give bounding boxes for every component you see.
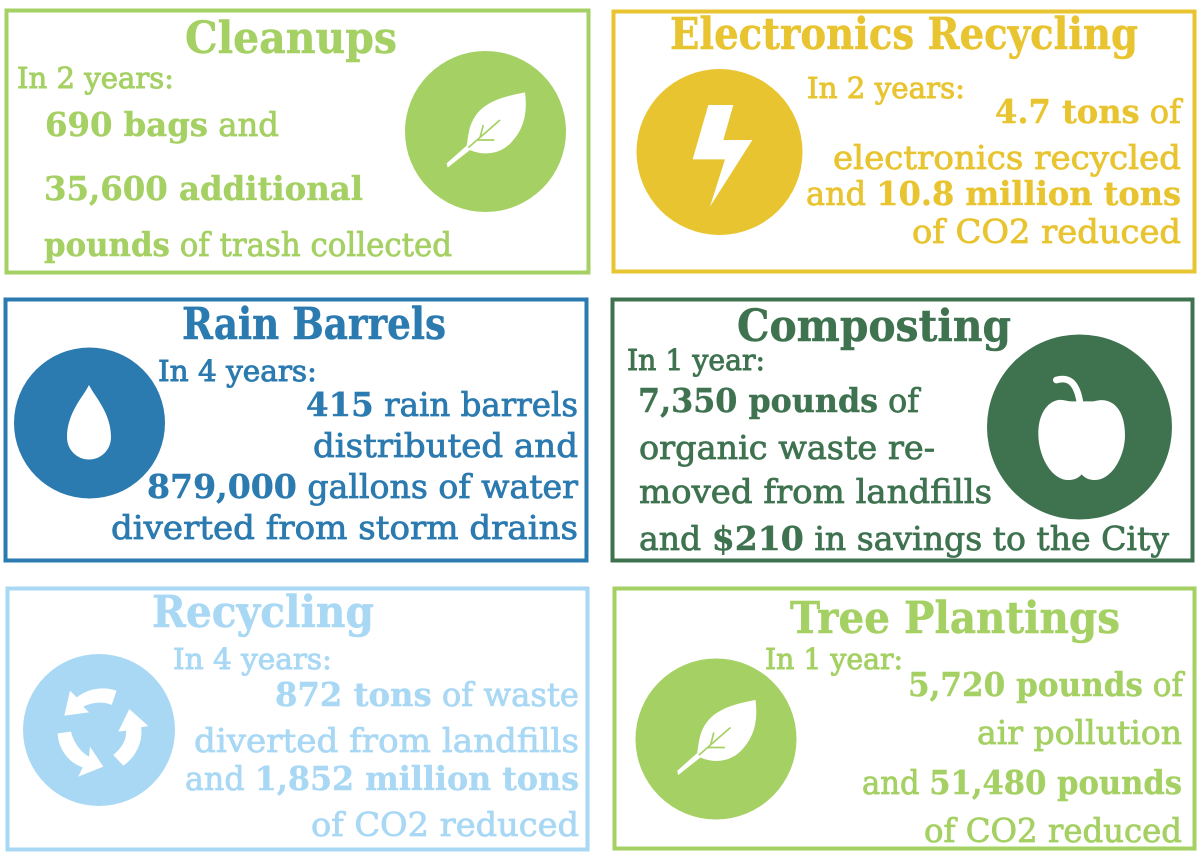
text block: recycling stats xyxy=(185,675,579,844)
text: period: In 4 years: xyxy=(173,642,332,676)
text block: tree planting stats xyxy=(862,665,1186,850)
panel: electronics recycling xyxy=(614,9,1194,272)
panel: rain barrels xyxy=(6,299,586,560)
text block: composting stats: 7,350 pounds of xyxy=(638,381,922,420)
heading: Rain Barrels: Rain Barrels xyxy=(182,299,446,350)
text block: cleanups stats xyxy=(44,105,452,264)
text block: recycling stats: 872 tons of waste xyxy=(275,675,579,714)
text block: rain barrel stats: distributed and xyxy=(313,426,578,465)
text: period: In 2 years: xyxy=(807,71,965,105)
text block: electronics stats: electronics recycled xyxy=(833,138,1181,177)
text block: electronics stats: and 10.8 million tons xyxy=(806,174,1181,213)
text: period: In 1 year: xyxy=(765,642,903,676)
text block: rain barrel stats: diverted from storm drains xyxy=(111,508,578,547)
text block: electronics stats: of CO2 reduced xyxy=(912,212,1181,251)
icon: lightning bolt in yellow circle xyxy=(636,69,802,235)
text block: composting stats: organic waste re- xyxy=(639,428,935,467)
text block: tree planting stats: of CO2 reduced xyxy=(924,811,1182,850)
panel: cleanups xyxy=(6,10,588,272)
text block: recycling stats: and 1,852 million tons xyxy=(185,759,579,798)
text: period: In 4 years: xyxy=(158,354,317,388)
heading: Cleanups: Cleanups xyxy=(185,13,397,64)
text block: composting stats xyxy=(638,381,1169,558)
panel: tree plantings xyxy=(614,588,1194,850)
icon: leaf in green circle xyxy=(405,51,566,212)
heading: Recycling: Recycling xyxy=(152,587,374,638)
text block: composting stats: moved from landfills xyxy=(639,472,992,511)
text block: recycling stats: of CO2 reduced xyxy=(311,805,579,844)
icon: recycling arrows in light blue circle xyxy=(23,654,175,806)
text block: rain barrel stats xyxy=(111,385,578,547)
text block: cleanups stats: 35,600 additional xyxy=(44,169,363,208)
panel: recycling xyxy=(8,587,588,850)
text: period: In 1 year: xyxy=(627,343,765,377)
text block: rain barrel stats: 415 rain barrels xyxy=(306,385,578,424)
text block: cleanups stats: 690 bags and xyxy=(45,105,279,144)
icon: pepper in dark green circle xyxy=(987,334,1172,520)
text block: tree planting stats: and 51,480 pounds xyxy=(862,763,1182,802)
heading: Composting: Composting xyxy=(737,301,1011,352)
text block: recycling stats: diverted from landfills xyxy=(194,721,579,760)
text block: composting stats: and $210 in savings to the City xyxy=(639,519,1169,558)
text block: tree planting stats: 5,720 pounds of xyxy=(908,665,1186,704)
icon: water drop in blue circle xyxy=(14,348,165,498)
text block: tree planting stats: air pollution xyxy=(977,713,1182,752)
text block: electronics stats: 4.7 tons of xyxy=(995,92,1184,131)
panel: composting xyxy=(612,300,1192,560)
heading: Tree Plantings: Tree Plantings xyxy=(790,593,1120,644)
text block: rain barrel stats: 879,000 gallons of water xyxy=(147,467,578,506)
text block: electronics stats xyxy=(806,92,1184,251)
icon: leaf in green circle xyxy=(636,658,796,820)
text block: cleanups stats: pounds of trash collected xyxy=(44,225,452,264)
text: period: In 2 years: xyxy=(17,61,174,95)
heading: Electronics Recycling: Electronics Recycling xyxy=(670,9,1138,60)
